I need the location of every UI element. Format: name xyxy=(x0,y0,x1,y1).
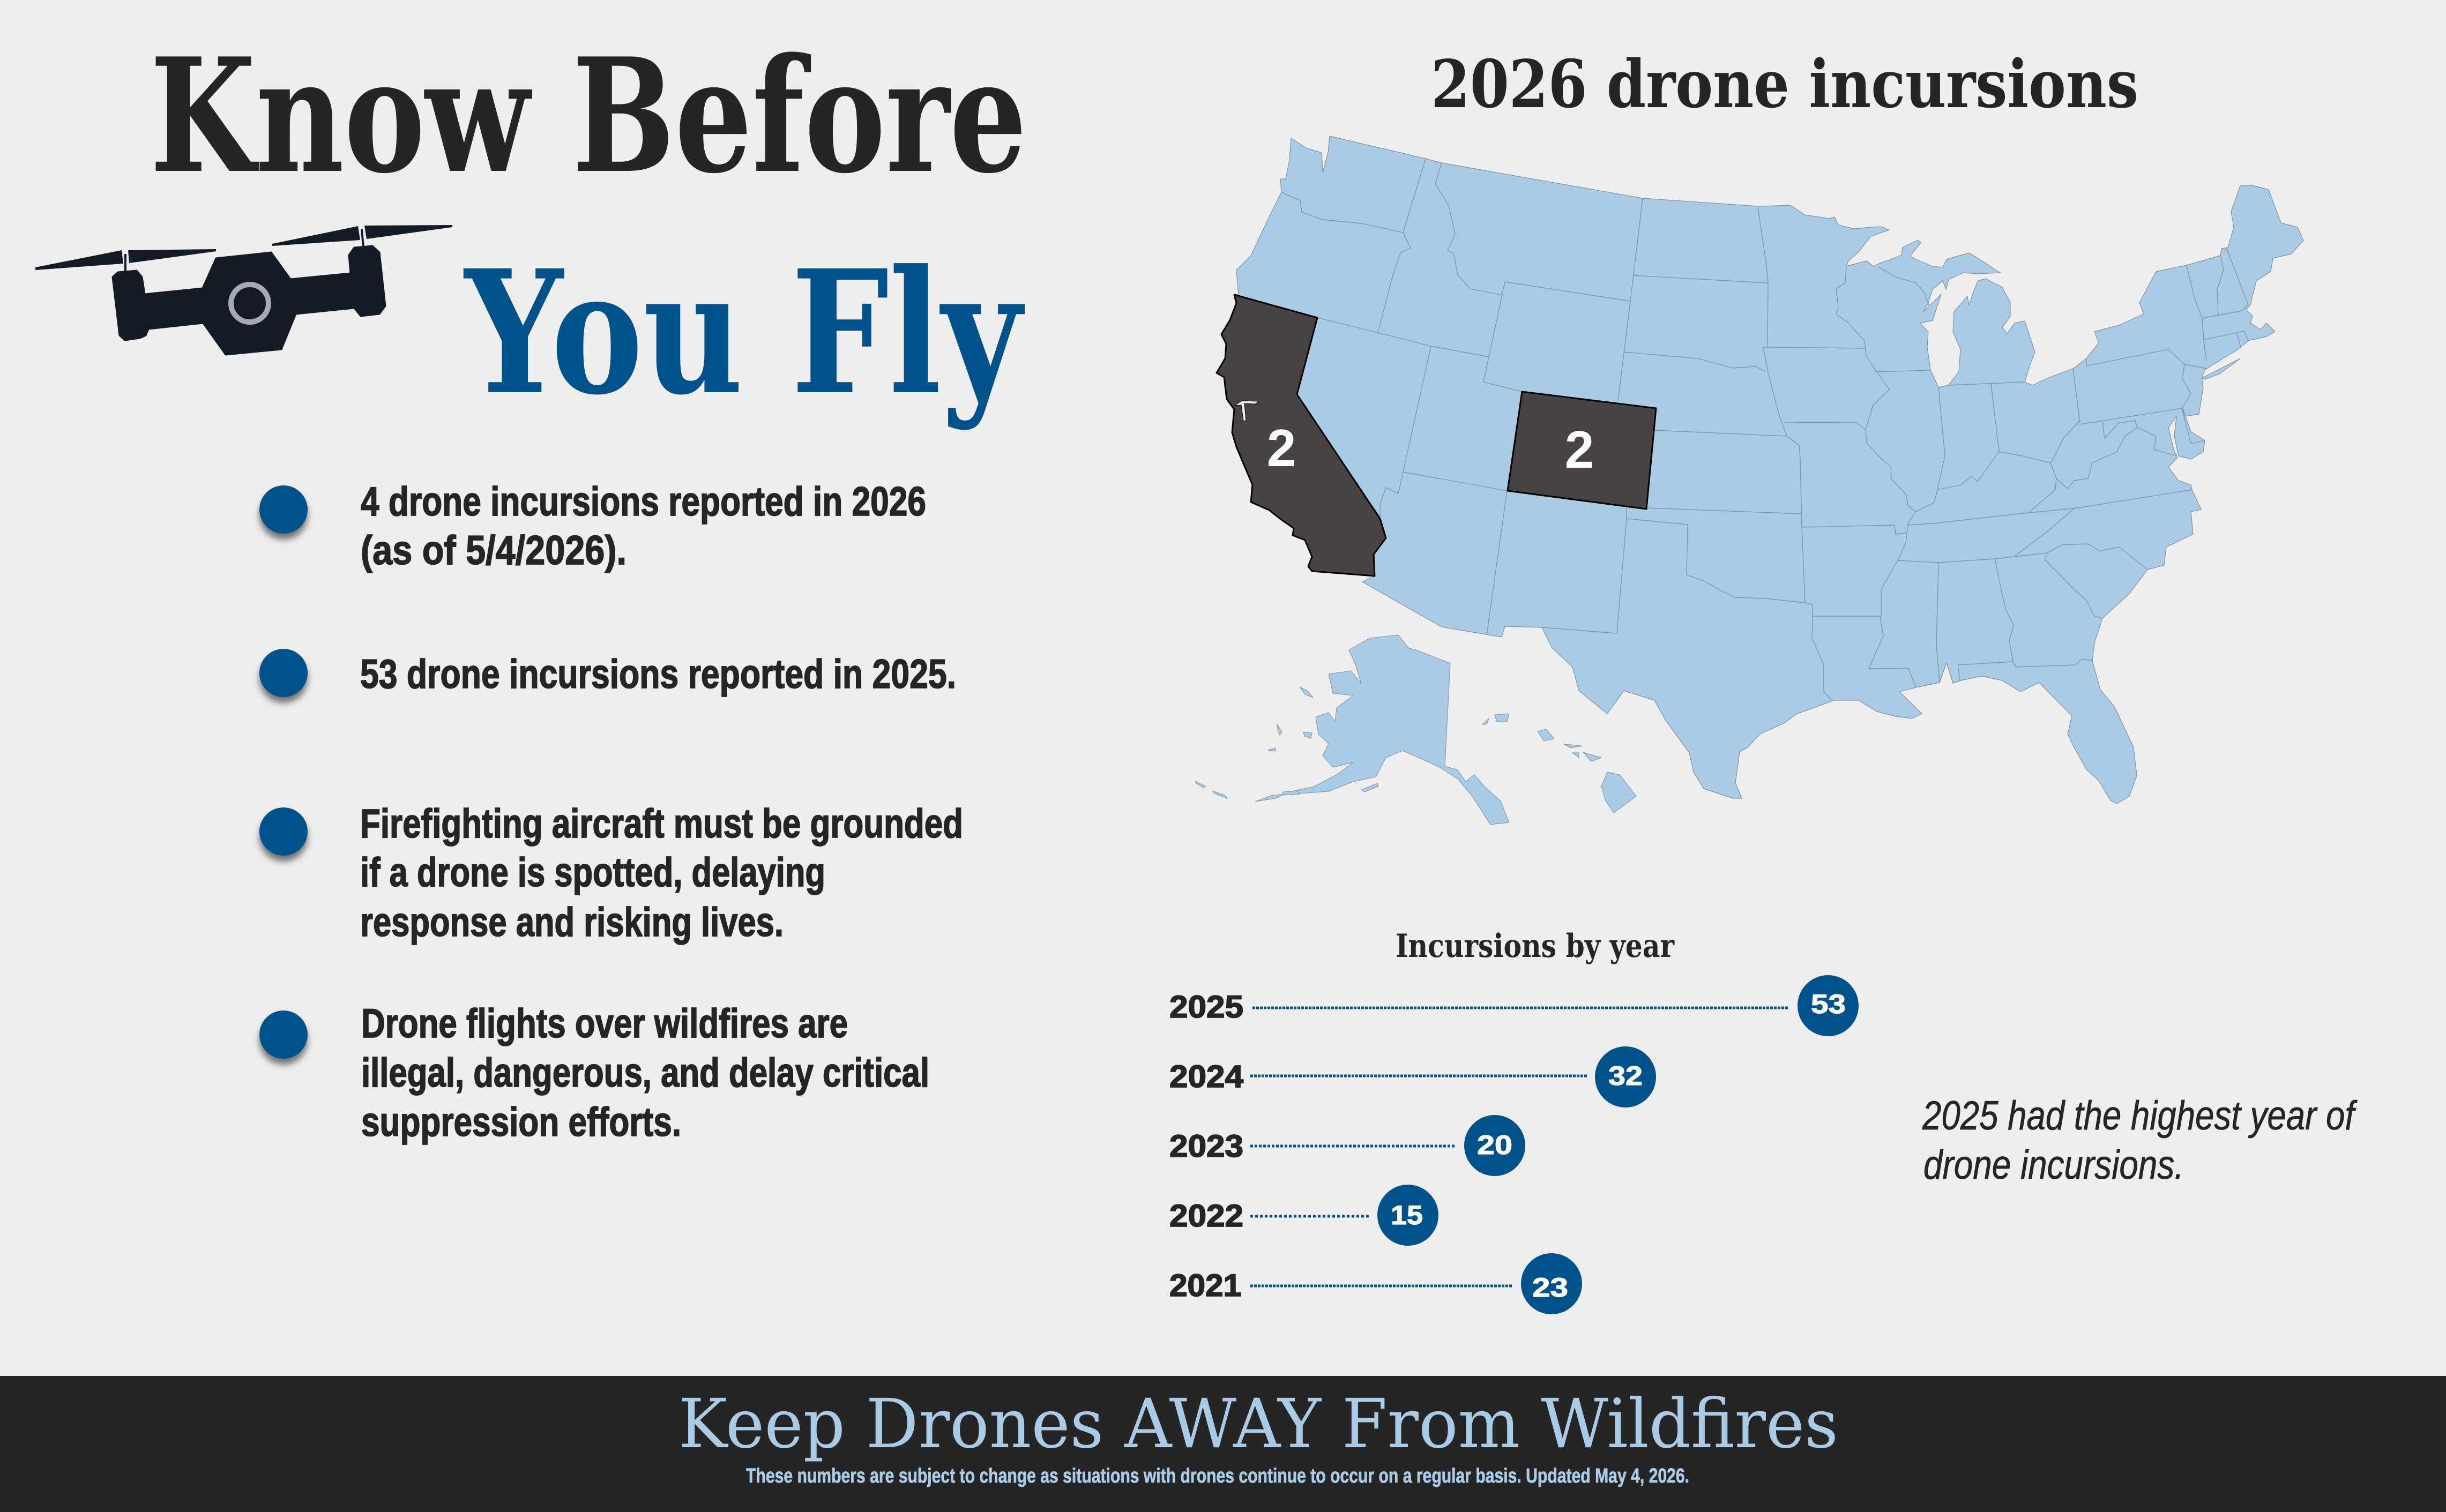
bullet: 4 incursions in 2026: (as of 5/4/2026). xyxy=(361,528,627,573)
chart title: Incursions by year xyxy=(1396,927,1675,965)
bullet: drone flights illegal: Drone flights over wildfires are xyxy=(361,1001,848,1046)
footer band xyxy=(0,1376,2446,1512)
map: Colorado highlighted: 2 xyxy=(1565,420,1594,479)
heading: 2026 drone incursions: 2026 drone incursions xyxy=(1431,46,2138,123)
row: 2024: 32 xyxy=(1608,1061,1643,1091)
row: 2021: 23 xyxy=(1532,1273,1568,1303)
row: 2022: 15 xyxy=(1391,1200,1423,1230)
bullet: 53 incursions in 2025: 53 drone incursions reported in 2025. xyxy=(360,652,956,697)
callout: 2025 highest year xyxy=(1922,1093,2358,1188)
map: Alaska xyxy=(1195,635,1509,825)
footer headline: Keep Drones AWAY From Wildfires xyxy=(678,1384,1838,1463)
bullet: firefighting aircraft grounded: if a drone is spotted, delaying xyxy=(360,850,825,895)
chart: incursions by year xyxy=(1169,927,1859,1314)
icon: drone xyxy=(35,225,452,355)
row: 2024: 2024 xyxy=(1169,1059,1243,1094)
title: Know Before: Know Before xyxy=(150,24,1027,208)
row: 2025: 53 xyxy=(1811,989,1846,1019)
row: 2025 xyxy=(1169,975,1859,1036)
bullet: 53 incursions in 2025 xyxy=(259,649,956,697)
bullet: drone flights illegal: illegal, dangerous, and delay critical xyxy=(361,1050,929,1096)
row: 2022 xyxy=(1169,1185,1438,1246)
bullet: firefighting aircraft grounded: Firefighting aircraft must be grounded xyxy=(360,801,963,847)
map: Hawaii xyxy=(1482,714,1636,813)
bullet: firefighting aircraft grounded xyxy=(259,801,963,945)
row: 2023: 2023 xyxy=(1169,1129,1243,1164)
bullet: drone flights illegal: suppression efforts. xyxy=(361,1099,681,1145)
map: California highlighted: 2 xyxy=(1267,418,1296,477)
bullet: drone flights illegal xyxy=(259,1001,929,1145)
callout: 2025 highest year: 2025 had the highest year of xyxy=(1922,1093,2358,1139)
footer note: These numbers are subject to change as situations with drones continue to occur on a regular basis. Updated May 4, 2026. xyxy=(746,1465,1689,1487)
row: 2021 xyxy=(1169,1253,1582,1314)
map: United States xyxy=(1195,136,2303,825)
row: 2024 xyxy=(1169,1046,1656,1107)
row: 2023 xyxy=(1169,1115,1525,1176)
map: Colorado highlighted xyxy=(1508,392,1656,509)
callout: 2025 highest year: drone incursions. xyxy=(1923,1142,2184,1188)
map: Long Island xyxy=(2202,358,2240,379)
bullet list xyxy=(259,479,963,1145)
bullet: 4 incursions in 2026 xyxy=(259,479,926,573)
row: 2021: 2021 xyxy=(1169,1268,1241,1303)
map: state borders xyxy=(1281,159,2248,700)
map: California highlighted xyxy=(1217,295,1386,576)
map: contiguous states xyxy=(1217,136,2303,804)
bullet: 4 incursions in 2026: 4 drone incursions reported in 2026 xyxy=(361,479,926,525)
bullet: firefighting aircraft grounded: response and risking lives. xyxy=(360,900,784,945)
row: 2025: 2025 xyxy=(1169,990,1243,1024)
row: 2022: 2022 xyxy=(1169,1199,1243,1233)
title: You Fly: You Fly xyxy=(463,233,1025,432)
row: 2023: 20 xyxy=(1477,1130,1512,1160)
